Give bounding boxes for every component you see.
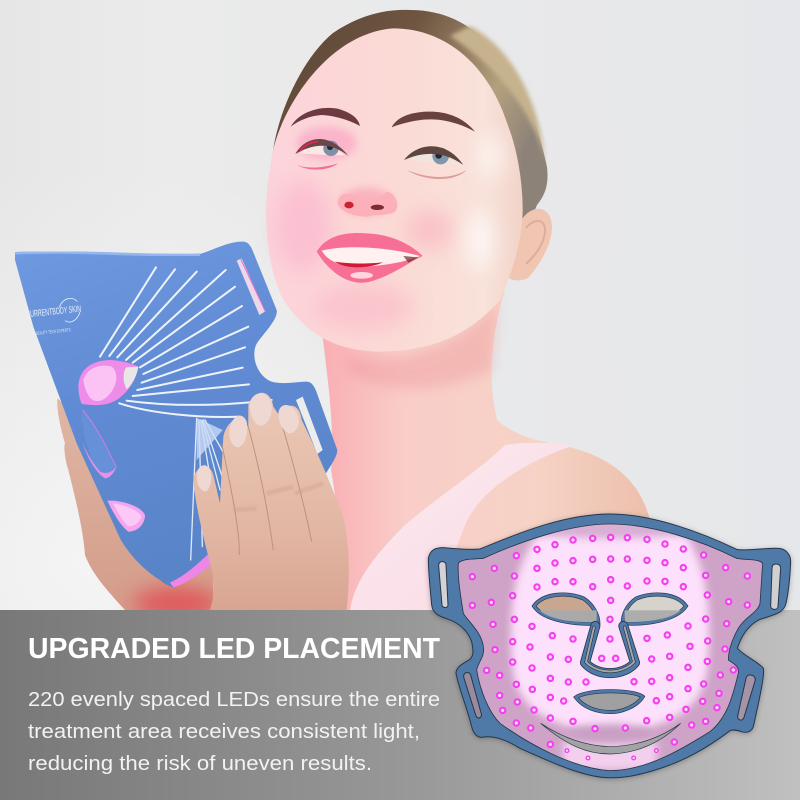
chin slit [541, 723, 681, 754]
radiating white lines from eye [100, 267, 272, 417]
body text: treatment area receives consistent light, [28, 720, 420, 743]
pink nose tone [340, 188, 393, 216]
heading: UPGRADED LED PLACEMENT [28, 633, 440, 665]
eye opening with pink glow [78, 360, 138, 405]
white tank top [350, 443, 572, 610]
knuckle shading [233, 483, 323, 510]
left cheek glow [275, 180, 332, 273]
lit inner face [450, 517, 770, 777]
fingernails [197, 393, 299, 492]
mouth [317, 233, 423, 283]
ear inner fold [526, 221, 545, 264]
head skin and facial features [266, 28, 523, 352]
left eye hole [534, 594, 598, 624]
held blue LED mask [15, 242, 337, 587]
ear [506, 209, 552, 280]
grey caption band [0, 610, 800, 800]
logo swirl [59, 298, 80, 322]
face [266, 28, 523, 352]
left eye [295, 139, 349, 156]
side slot [82, 410, 117, 478]
logo text: CURRENTBODY SKIN [26, 304, 82, 319]
finger creases [222, 423, 312, 555]
logo tagline: BEAUTY TECH EXPERTS [36, 327, 71, 336]
right strap slot top [237, 258, 265, 315]
lower white line fan [191, 418, 233, 560]
jaw shadow [345, 300, 498, 389]
left eyebrow [291, 108, 360, 127]
chin glow [313, 283, 413, 330]
mask shell [428, 514, 791, 778]
back hand behind mask [57, 398, 220, 620]
nose [337, 192, 397, 217]
body text: reducing the risk of uneven results. [28, 752, 372, 775]
right eyebrow [392, 112, 475, 132]
neck, chest and shoulder [322, 290, 650, 610]
body text: 220 evenly spaced LEDs ensure the entire [28, 688, 440, 711]
body text [28, 688, 440, 775]
strap slots [439, 562, 781, 720]
inner face outline [458, 524, 763, 771]
pink eye area [297, 127, 357, 160]
red glow on back hand [133, 587, 220, 620]
left eye lower lid [297, 163, 338, 170]
LED dots [470, 535, 750, 760]
hair highlight [450, 26, 546, 165]
front hand palm and fingers [193, 393, 349, 610]
mouth hole [576, 691, 643, 712]
LED mask diagram [428, 514, 791, 778]
mask rim highlight [15, 252, 200, 255]
right strap slot bottom [296, 397, 323, 454]
right eye hole [623, 594, 686, 624]
right cheek glow [407, 210, 453, 250]
lower mouth opening [107, 501, 145, 532]
nose slit [585, 626, 635, 673]
hair [272, 10, 548, 222]
woman [266, 10, 650, 610]
temple highlight [480, 133, 503, 180]
chin glow opening [170, 554, 213, 587]
cheek highlight [467, 210, 493, 270]
right eye [404, 146, 467, 179]
